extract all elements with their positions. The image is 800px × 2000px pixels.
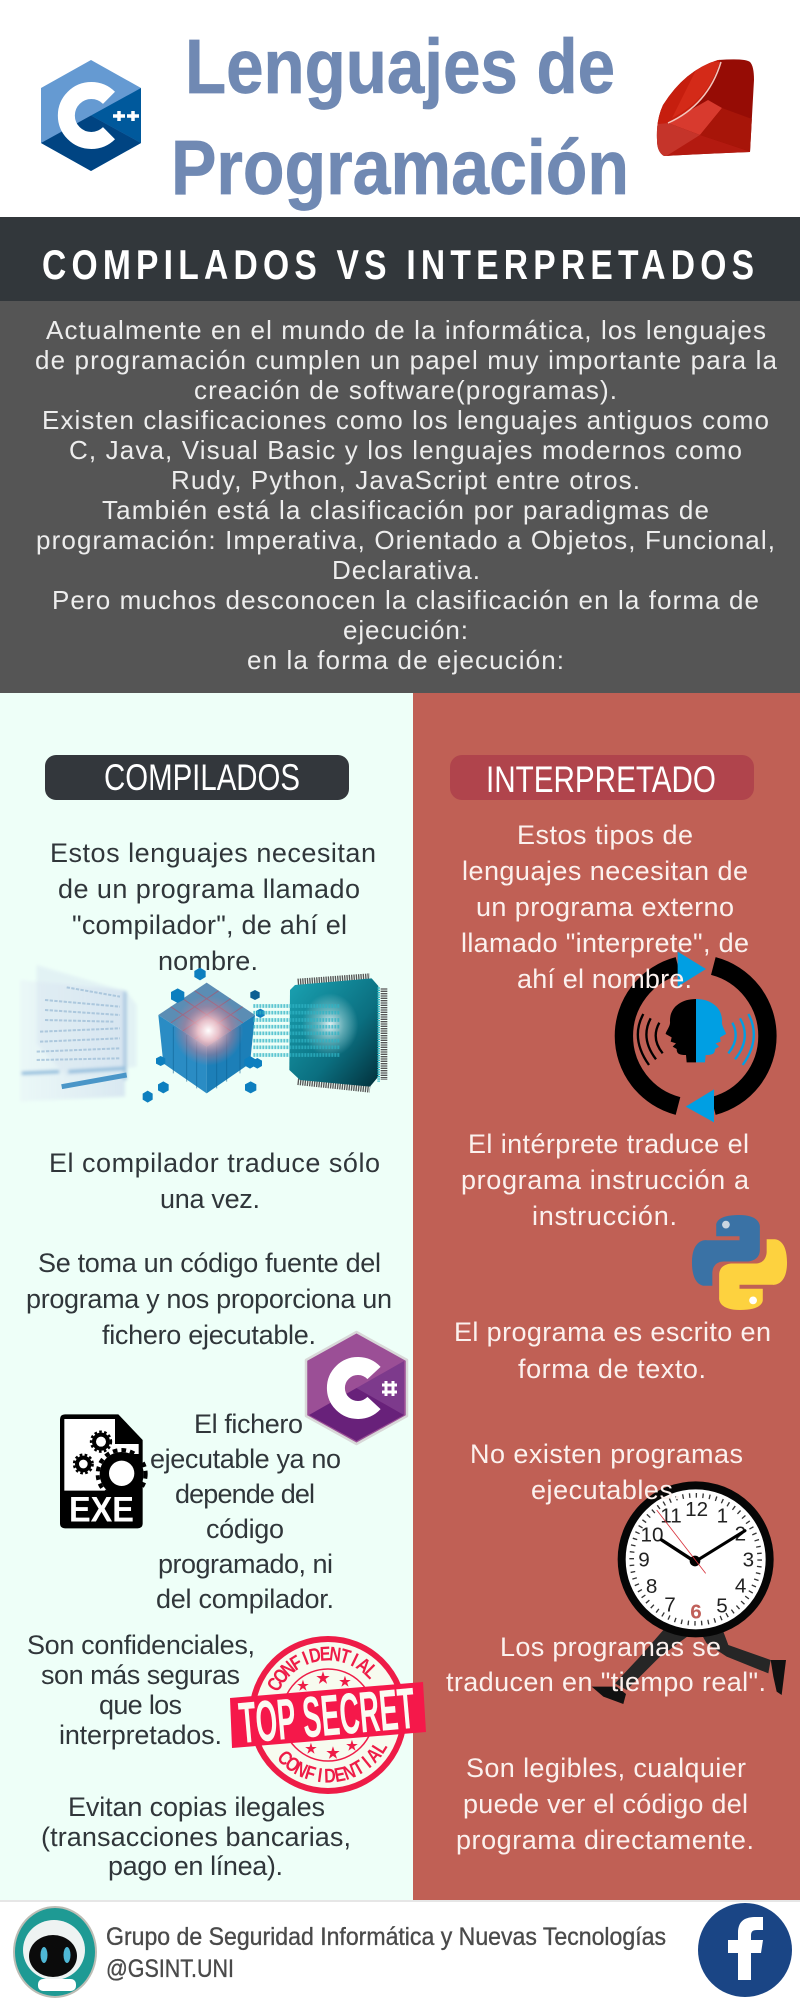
label: interpretado: INTERPRETADO	[486, 759, 716, 800]
icon: top secret stamp: ★	[297, 1678, 309, 1693]
text: executable independent: depende del	[175, 1479, 315, 1509]
text: written as text	[454, 1317, 771, 1384]
icon: EXE file	[60, 1414, 146, 1530]
panel: introduction: Pero muchos desconocen la clasificación en la forma de	[52, 585, 759, 615]
footer	[0, 1900, 800, 2000]
text: compiler definition: nombre.	[158, 946, 258, 976]
icon: top secret stamp: I	[358, 1752, 375, 1772]
illustration: code to compiler to chip	[20, 965, 384, 1103]
icon: top secret stamp: N	[328, 1643, 342, 1666]
icon: EXE file: EXE	[69, 1491, 134, 1530]
text: executable independent: programado, ni	[158, 1549, 333, 1579]
icon: speaking head cycle	[624, 952, 767, 1122]
icon: robot avatar	[14, 1907, 96, 1997]
icon: C++ logo	[41, 60, 141, 171]
text: legible: programa directamente.	[456, 1825, 754, 1855]
icon: top secret stamp: C	[273, 1746, 297, 1770]
text: instruction translation: El intérprete traduce el	[468, 1129, 749, 1159]
icon: top secret stamp: L	[368, 1737, 392, 1757]
text: interprete definition	[461, 820, 749, 994]
text: interprete definition: un programa externo	[476, 892, 734, 922]
icon: Ruby gem	[656, 59, 754, 156]
microchip	[253, 977, 384, 1089]
text: written as text: El programa es escrito en	[454, 1317, 771, 1347]
panel: introduction: C, Java, Visual Basic y los lenguajes modernos como	[69, 435, 742, 465]
heading band	[0, 217, 800, 301]
text: source code: Se toma un código fuente del	[38, 1248, 381, 1278]
text: executable independent: código	[206, 1514, 284, 1544]
panel: introduction	[0, 301, 800, 693]
panel: introduction: de programación cumplen un papel muy importante para la	[35, 345, 778, 375]
panel: interpretado	[413, 693, 800, 1900]
icon: top secret stamp: A	[362, 1744, 386, 1767]
panel: introduction: Actualmente en el mundo de la informática, los lenguajes	[46, 315, 766, 345]
panel: introduction: ejecución:	[343, 615, 468, 645]
panel: introduction: Existen clasificaciones como los lenguajes antiguos como	[42, 405, 769, 435]
text: compiler definition: "compilador", de ahí el	[72, 910, 347, 940]
text: group name	[106, 1923, 666, 1983]
icon: top secret stamp: ★	[346, 1738, 358, 1753]
icon: running clock: 7	[664, 1593, 676, 1616]
text: compiler definition: Estos lenguajes necesitan	[50, 838, 376, 868]
icon: top secret stamp	[230, 1639, 426, 1791]
icon: running clock: 12	[685, 1498, 708, 1521]
text: real time	[446, 1632, 766, 1697]
header	[41, 24, 760, 211]
text: legible: puede ver el código del	[463, 1789, 748, 1819]
icon: top secret stamp: ★	[326, 1745, 340, 1762]
text: source code	[26, 1248, 392, 1350]
text: legible: Son legibles, cualquier	[466, 1753, 746, 1783]
text: confidential: son más seguras	[41, 1660, 240, 1690]
text: confidential	[27, 1630, 255, 1750]
icon: top secret stamp: F	[286, 1651, 306, 1675]
icon: running clock: 3	[743, 1549, 754, 1572]
icon: running clock: 2	[735, 1523, 746, 1546]
icon: top secret stamp: N	[291, 1757, 311, 1782]
icon: top secret stamp: ★	[305, 1741, 317, 1756]
icon: C sharp logo	[306, 1332, 407, 1444]
text: executable independent	[150, 1409, 341, 1614]
icon: running clock: 11	[660, 1504, 682, 1527]
icon: top secret stamp: D	[307, 1643, 323, 1667]
text: no executables: No existen programas	[470, 1439, 743, 1469]
text: written as text: forma de texto.	[518, 1354, 706, 1384]
text: interprete definition: Estos tipos de	[517, 820, 693, 850]
icon: top secret stamp: D	[324, 1765, 336, 1787]
text: executable independent: ejecutable ya no	[150, 1444, 341, 1474]
icon: running clock: 5	[716, 1594, 728, 1617]
text: avoid copies: pago en línea).	[108, 1851, 283, 1881]
icon: top secret stamp: TOP SECRET	[236, 1676, 417, 1756]
band title: COMPILADOS VS INTERPRETADOS	[42, 243, 754, 289]
icon: top secret stamp: ★	[339, 1674, 351, 1689]
icon: facebook	[698, 1903, 792, 1997]
text: compiles once: una vez.	[160, 1184, 260, 1214]
text: executable independent: El fichero	[194, 1409, 303, 1439]
icon: running clock: 6	[690, 1600, 702, 1623]
text: avoid copies: (transacciones bancarias,	[41, 1822, 351, 1852]
icon: running clock: 8	[646, 1575, 657, 1598]
text: confidential: que los	[99, 1690, 182, 1720]
source code sheets	[20, 965, 137, 1102]
text: no executables: ejecutables.	[531, 1475, 681, 1505]
text: avoid copies: Evitan copias ilegales	[68, 1792, 325, 1822]
text: instruction translation: programa instrucción a	[461, 1165, 750, 1195]
text: interprete definition: ahí el nombre.	[517, 964, 692, 994]
icon: top secret stamp: F	[302, 1761, 318, 1785]
icon: top secret stamp: O	[268, 1664, 293, 1688]
icon: Python logo	[692, 1215, 787, 1310]
title	[171, 24, 629, 211]
text: instruction translation	[461, 1129, 750, 1231]
text: interprete definition: lenguajes necesitan de	[462, 856, 748, 886]
cube	[143, 968, 265, 1103]
text: source code: programa y nos proporciona un	[26, 1284, 392, 1314]
text: group name: Grupo de Seguridad Informática y Nuevas Tecnologías	[106, 1923, 666, 1951]
title: Lenguajes de	[185, 24, 615, 110]
icon: top secret stamp: N	[276, 1657, 300, 1681]
icon: top secret stamp: E	[332, 1763, 347, 1787]
panel: introduction: creación de software(programas).	[194, 375, 617, 405]
panel: introduction: También está la clasificación por paradigmas de	[102, 495, 709, 525]
text: source code: fichero ejecutable.	[102, 1320, 316, 1350]
icon: top secret stamp: ★	[316, 1670, 330, 1687]
text: compiler definition: de un programa llamado	[58, 874, 360, 904]
text: executable independent: del compilador.	[156, 1584, 334, 1614]
text: avoid copies	[41, 1792, 351, 1881]
text: compiles once: El compilador traduce sólo	[49, 1148, 380, 1178]
icon: top secret stamp: C	[263, 1674, 288, 1695]
title: Programación	[171, 125, 629, 211]
text: confidential: Son confidenciales,	[27, 1630, 255, 1660]
icon: top secret stamp: I	[348, 1649, 362, 1671]
icon: top secret stamp: L	[360, 1661, 382, 1683]
icon: top secret stamp: O	[281, 1752, 304, 1777]
text: real time: traducen en "tiempo real".	[446, 1667, 766, 1697]
icon: running clock: 4	[735, 1575, 746, 1598]
icon: top secret stamp: T	[349, 1756, 368, 1780]
text: instruction translation: instrucción.	[532, 1201, 677, 1231]
icon: top secret stamp: I	[299, 1647, 311, 1669]
icon: top secret stamp: T	[337, 1644, 353, 1668]
text: confidential: interpretados.	[59, 1720, 222, 1750]
text: real time: Los programas se	[500, 1632, 721, 1662]
icon: top secret stamp: A	[352, 1653, 375, 1678]
icon: top secret stamp: I	[316, 1764, 324, 1787]
text: interprete definition: llamado "interprete", de	[461, 928, 749, 958]
panel: introduction: Declarativa.	[332, 555, 480, 585]
text: legible	[456, 1753, 754, 1855]
panel: introduction: en la forma de ejecución:	[247, 645, 564, 675]
panel: compilados	[0, 693, 426, 1900]
panel: introduction: programación: Imperativa, Orientado a Objetos, Funcional,	[36, 525, 775, 555]
icon: top secret stamp: N	[340, 1760, 359, 1784]
icon: running clock: 1	[717, 1504, 728, 1527]
icon: running clock: 10	[641, 1524, 663, 1547]
icon: running clock	[592, 1485, 786, 1704]
text: compiler definition	[50, 838, 376, 976]
icon: running clock: 9	[638, 1549, 650, 1572]
text: no executables	[470, 1439, 743, 1505]
text: compiles once	[49, 1148, 380, 1214]
icon: top secret stamp: E	[319, 1643, 331, 1665]
label: compilados: COMPILADOS	[104, 757, 300, 798]
text: group name: @GSINT.UNI	[106, 1955, 234, 1983]
panel: introduction: Rudy, Python, JavaScript entre otros.	[171, 465, 640, 495]
